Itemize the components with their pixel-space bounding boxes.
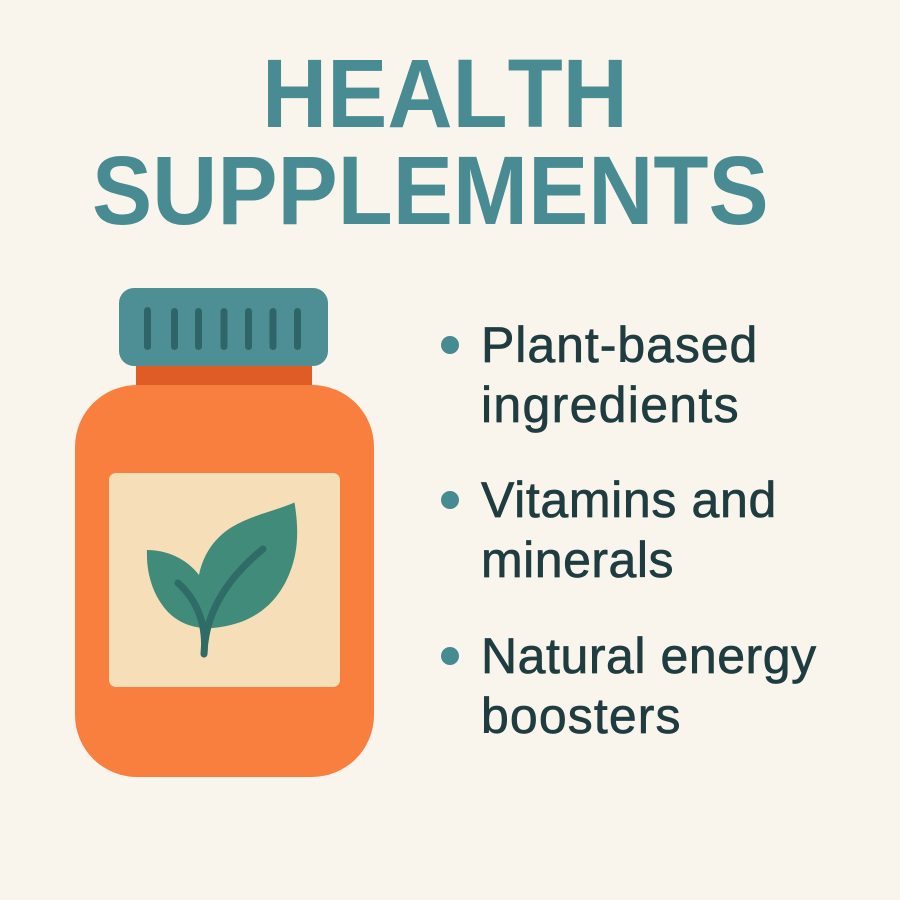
bullet: natural energy boosters: Natural energy bbox=[481, 628, 817, 684]
bullet: plant-based ingredients: Plant-based bbox=[481, 317, 758, 373]
bullet: vitamins and minerals: Vitamins and bbox=[481, 472, 777, 528]
bottle neck bbox=[136, 350, 312, 400]
title: SUPPLEMENTS bbox=[92, 136, 769, 245]
bullet: natural energy boosters: boosters bbox=[481, 688, 682, 744]
title: HEALTH bbox=[262, 39, 628, 148]
bottle label bbox=[109, 473, 340, 687]
icon: leaf bbox=[147, 502, 297, 654]
bullet: plant-based ingredients: ingredients bbox=[481, 377, 740, 433]
bottle body bbox=[75, 385, 374, 777]
bullet: natural energy boosters bbox=[441, 628, 817, 744]
bottle cap bbox=[119, 288, 328, 366]
bullet: vitamins and minerals bbox=[441, 472, 777, 588]
bullet: plant-based ingredients bbox=[441, 317, 758, 433]
bullet: vitamins and minerals: minerals bbox=[481, 532, 674, 588]
title bbox=[92, 39, 769, 245]
